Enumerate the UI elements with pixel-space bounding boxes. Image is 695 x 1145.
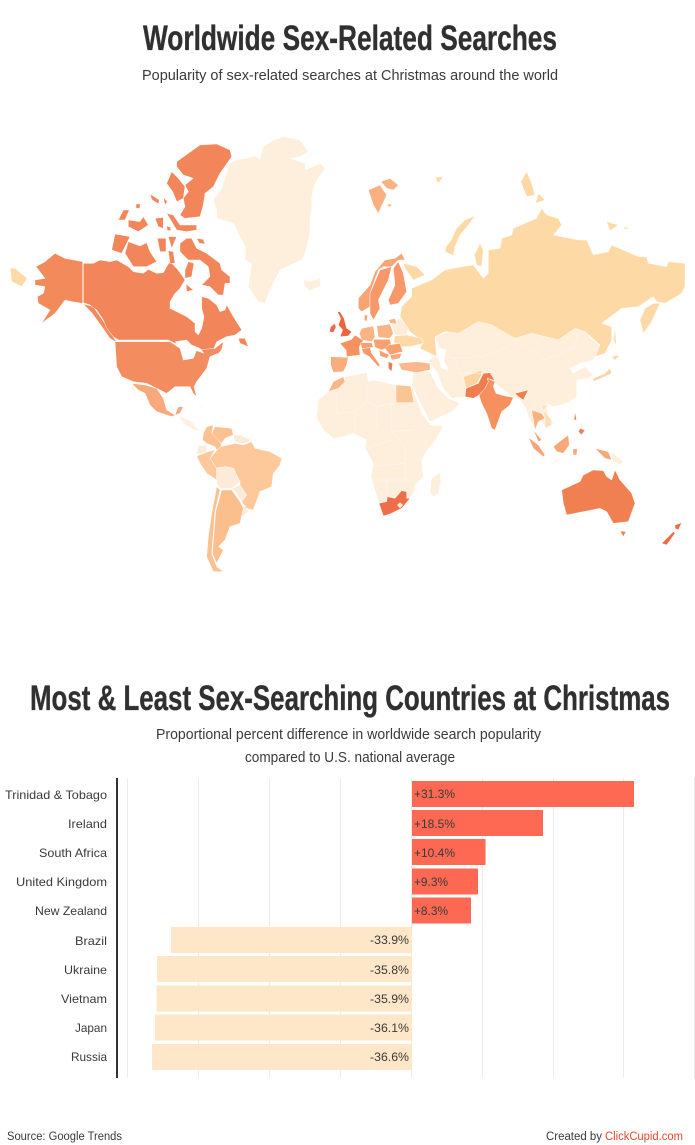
Germany (359, 326, 375, 342)
credit: Created by (546, 1131, 602, 1143)
country labels (5, 788, 107, 1064)
Great Lakes (175, 340, 204, 360)
Canada (83, 144, 248, 353)
Morocco (328, 377, 345, 392)
Spain and Portugal (331, 357, 348, 372)
Australia (562, 470, 635, 523)
USA (115, 342, 223, 397)
Denmark (364, 315, 368, 322)
value labels: +10.4% (414, 846, 455, 860)
Bangladesh and NE India (515, 390, 528, 400)
Turkey (398, 362, 430, 373)
Romania (385, 343, 403, 355)
country labels: Brazil (75, 934, 107, 948)
country labels: Ireland (68, 817, 107, 831)
Uruguay (239, 505, 248, 517)
Bolivia (217, 467, 240, 488)
Belarus and Baltics (392, 318, 408, 335)
value labels: -36.6% (370, 1050, 409, 1064)
map: Southeast Asia (528, 405, 623, 465)
map: South and East Asia (412, 320, 682, 545)
Bulgaria (390, 353, 402, 360)
Middle East and Arabia (412, 372, 460, 422)
Norway (358, 253, 405, 312)
Peru (197, 450, 217, 480)
negative bars (152, 927, 412, 1070)
chart subtitle (156, 727, 542, 766)
source note: Source: Google Trends (7, 1131, 122, 1143)
Central Europe (373, 339, 392, 350)
value labels: +9.3% (414, 875, 448, 889)
central and east Asia (428, 320, 600, 430)
Novaya Zemlya (445, 216, 475, 256)
Caspian Sea (438, 348, 448, 370)
diverging bar chart (5, 778, 694, 1078)
Thailand (532, 410, 545, 430)
map: USA, Latin America (115, 340, 282, 572)
Serbia (379, 350, 389, 358)
map: Africa (317, 373, 443, 516)
Sakhalin (613, 327, 617, 347)
country labels: Ukraine (64, 963, 107, 977)
vertical axis (116, 778, 118, 1078)
Paraguay (232, 485, 247, 502)
chart subtitle: compared to U.S. national average (245, 750, 455, 766)
United Kingdom (337, 312, 352, 337)
value labels: -33.9% (370, 933, 409, 947)
Severnaya Zemlya (521, 172, 535, 197)
Kola Peninsula (403, 263, 425, 280)
Iceland (303, 278, 321, 291)
value labels: +31.3% (414, 787, 455, 801)
Africa country borders (337, 385, 413, 500)
Ecuador (197, 445, 207, 455)
Sweden (370, 267, 392, 320)
value labels: -35.8% (370, 963, 409, 977)
Malay Peninsula (533, 430, 542, 442)
Tasmania (620, 531, 626, 537)
Venezuela (212, 427, 233, 443)
value labels: +18.5% (414, 817, 455, 831)
New Zealand (662, 532, 675, 545)
Africa (317, 373, 443, 516)
New Guinea west (595, 448, 612, 460)
Brazil (210, 442, 282, 510)
Kamchatka (640, 303, 660, 333)
Russia (400, 208, 685, 357)
credit (546, 1131, 683, 1143)
India (479, 378, 513, 430)
Greenland (213, 137, 325, 303)
subtitle: Popularity of sex-related searches at Christmas around the world (142, 68, 558, 84)
Colombia (203, 425, 222, 450)
country labels: Russia (71, 1050, 107, 1064)
title: Worldwide Sex-Related Searches (143, 19, 557, 58)
country labels: Vietnam (61, 992, 107, 1006)
Poland (377, 324, 393, 338)
Philippines (574, 412, 577, 420)
New Siberian Islands (607, 222, 618, 231)
Yamal (474, 243, 483, 267)
Svalbard (368, 185, 387, 213)
country labels: New Zealand (35, 904, 107, 918)
value labels (370, 787, 455, 1064)
credit: ClickCupid.com (605, 1131, 683, 1143)
Caribbean (195, 403, 207, 408)
value labels: -36.1% (370, 1021, 409, 1035)
value labels: +8.3% (414, 904, 448, 918)
Chukotka tip (10, 268, 27, 287)
Pakistan (465, 373, 495, 398)
Mexico (132, 383, 183, 417)
Ukraine (393, 335, 423, 347)
Lesotho (397, 503, 403, 508)
chart subtitle: Proportional percent difference in worldwide search popularity (156, 727, 542, 743)
Borneo (553, 435, 569, 453)
Japan (612, 355, 620, 360)
map: Russia and northern Asia (368, 172, 685, 382)
Baja California (131, 383, 138, 398)
value labels: -35.9% (370, 992, 409, 1006)
Argentina (212, 490, 243, 563)
Egypt (396, 385, 414, 403)
Vietnam and Laos (542, 405, 552, 428)
Greece (388, 362, 393, 372)
Ireland (329, 323, 336, 333)
country labels: Trinidad & Tobago (5, 788, 107, 802)
country labels: United Kingdom (16, 875, 107, 889)
map: North America and Arctic (10, 137, 325, 353)
country labels: Japan (75, 1021, 107, 1035)
Alaska panhandle (83, 304, 117, 343)
Finland (388, 262, 407, 305)
positive bars (412, 781, 634, 924)
Guianas (233, 435, 252, 444)
country labels: South Africa (39, 846, 107, 860)
Java (547, 458, 563, 463)
France (340, 335, 363, 357)
Central Asia borders (440, 328, 578, 373)
Italy (362, 347, 380, 367)
Alaska (35, 253, 83, 323)
South Africa (379, 491, 410, 516)
world choropleth map (10, 137, 685, 572)
Sumatra (528, 437, 545, 457)
Chile (207, 487, 223, 572)
Madagascar (430, 473, 441, 497)
map: Europe (329, 253, 430, 373)
Papua New Guinea (612, 452, 623, 465)
Alpine countries (361, 343, 373, 349)
Sulawesi (573, 448, 577, 455)
Afghanistan (463, 370, 482, 388)
Central America (178, 415, 200, 431)
